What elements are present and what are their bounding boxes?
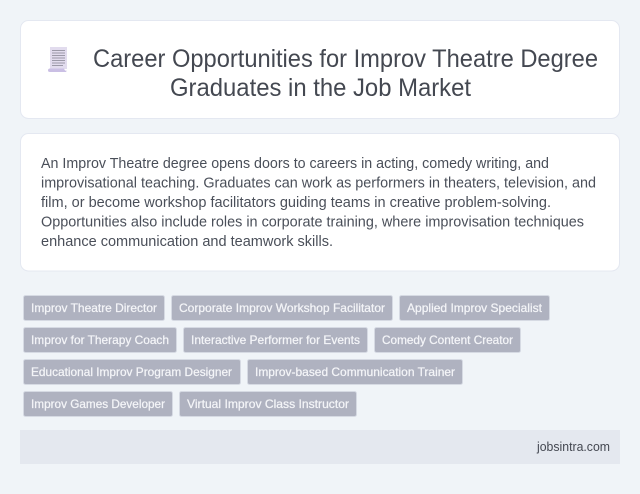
description text bbox=[41, 156, 596, 250]
tag: Corporate Improv Workshop Facilitator: Corporate Improv Workshop Facilitator bbox=[179, 301, 385, 315]
tag: Educational Improv Program Designer: Educational Improv Program Designer bbox=[31, 365, 232, 379]
tag: Improv-based Communication Trainer bbox=[248, 360, 462, 384]
description text: Opportunities also include roles in corporate training, where improvisation techniques bbox=[41, 214, 584, 230]
footer bar: jobsintra.com bbox=[536, 440, 610, 454]
tag: Improv-based Communication Trainer: Improv-based Communication Trainer bbox=[255, 365, 455, 379]
icon: document scroll bbox=[48, 47, 67, 72]
title bbox=[93, 45, 598, 102]
tag: Improv Theatre Director: Improv Theatre Director bbox=[31, 301, 157, 315]
tag: Virtual Improv Class Instructor: Virtual Improv Class Instructor bbox=[187, 397, 349, 411]
title: Career Opportunities for Improv Theatre Degree bbox=[93, 45, 598, 73]
description text: An Improv Theatre degree opens doors to careers in acting, comedy writing, and bbox=[41, 156, 549, 172]
title: Graduates in the Job Market bbox=[170, 74, 471, 102]
tag: Interactive Performer for Events: Interactive Performer for Events bbox=[191, 333, 360, 347]
description text: improvisational teaching. Graduates can work as performers in theaters, television, and bbox=[41, 176, 596, 192]
tag: Improv Theatre Director bbox=[24, 296, 164, 320]
tag: Interactive Performer for Events bbox=[184, 328, 368, 352]
panel: title card bbox=[20, 20, 620, 118]
tag: Comedy Content Creator bbox=[374, 328, 520, 352]
tag: Improv Games Developer: Improv Games Developer bbox=[31, 397, 165, 411]
tag: Improv for Therapy Coach: Improv for Therapy Coach bbox=[31, 333, 169, 347]
description text: film, or become workshop facilitators guiding teams in creative problem-solving. bbox=[41, 195, 551, 211]
tag: Comedy Content Creator: Comedy Content Creator bbox=[382, 333, 513, 347]
tag: Improv for Therapy Coach bbox=[24, 328, 176, 352]
tag: Improv Games Developer bbox=[24, 392, 172, 416]
tag: Corporate Improv Workshop Facilitator bbox=[172, 296, 392, 320]
tag: Applied Improv Specialist bbox=[400, 296, 550, 320]
tag: Educational Improv Program Designer bbox=[24, 360, 240, 384]
panel: description card bbox=[20, 134, 620, 271]
tag: Applied Improv Specialist: Applied Improv Specialist bbox=[407, 301, 543, 315]
tag list bbox=[24, 296, 550, 416]
tag: Virtual Improv Class Instructor bbox=[180, 392, 356, 416]
description text: enhance communication and teamwork skills. bbox=[41, 234, 333, 250]
footer bar bbox=[20, 430, 620, 464]
